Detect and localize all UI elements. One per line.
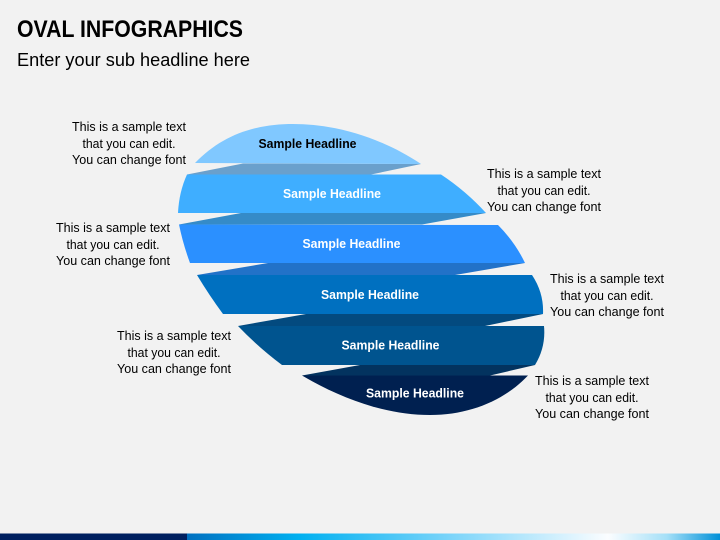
band 2	[178, 174, 486, 213]
band 5: Sample Headline	[342, 338, 440, 352]
text block 4: that you can edit.	[560, 289, 654, 303]
band 6: Sample Headline	[366, 386, 464, 400]
text block 5	[117, 329, 232, 376]
band 4	[197, 275, 543, 314]
band 5	[238, 326, 544, 365]
text block 1	[72, 120, 187, 167]
text block 5: You can change font	[117, 362, 232, 376]
text block 3: This is a sample text	[56, 221, 171, 235]
band 4: Sample Headline	[321, 288, 419, 302]
text block 6	[535, 374, 650, 421]
text block 1: that you can edit.	[82, 137, 176, 151]
band 5 shadow	[302, 365, 535, 376]
oval diagram	[178, 124, 544, 415]
text block 5: that you can edit.	[128, 346, 220, 360]
text block 5: This is a sample text	[117, 329, 232, 343]
text block 2	[487, 167, 602, 214]
text block 1: You can change font	[72, 153, 187, 167]
text block 3: You can change font	[56, 254, 171, 268]
text block 3: that you can edit.	[66, 238, 160, 252]
title: OVAL INFOGRAPHICS	[17, 16, 243, 43]
text block 4: This is a sample text	[550, 272, 665, 286]
text block 2: This is a sample text	[487, 167, 602, 181]
band 6	[302, 376, 528, 415]
band 3 shadow	[197, 263, 525, 275]
text block 1: This is a sample text	[72, 120, 187, 134]
band 1 shadow	[187, 164, 421, 174]
band 1: Sample Headline	[258, 137, 357, 151]
text block 6: This is a sample text	[535, 374, 650, 388]
band 3: Sample Headline	[302, 237, 401, 251]
text block 4	[550, 272, 665, 319]
text block 6: that you can edit.	[546, 391, 638, 405]
band 2 shadow	[179, 213, 486, 224]
text block 2: You can change font	[487, 200, 602, 214]
band 3	[179, 224, 525, 263]
band 4 shadow	[238, 314, 543, 326]
text block 2: that you can edit.	[498, 184, 590, 198]
text block 3	[56, 221, 171, 268]
band 2: Sample Headline	[283, 187, 381, 201]
text block 4: You can change font	[550, 305, 665, 319]
text block 6: You can change font	[535, 407, 650, 421]
footer bar	[0, 534, 720, 540]
subtitle: Enter your sub headline here	[17, 50, 250, 70]
band 1	[195, 124, 421, 164]
